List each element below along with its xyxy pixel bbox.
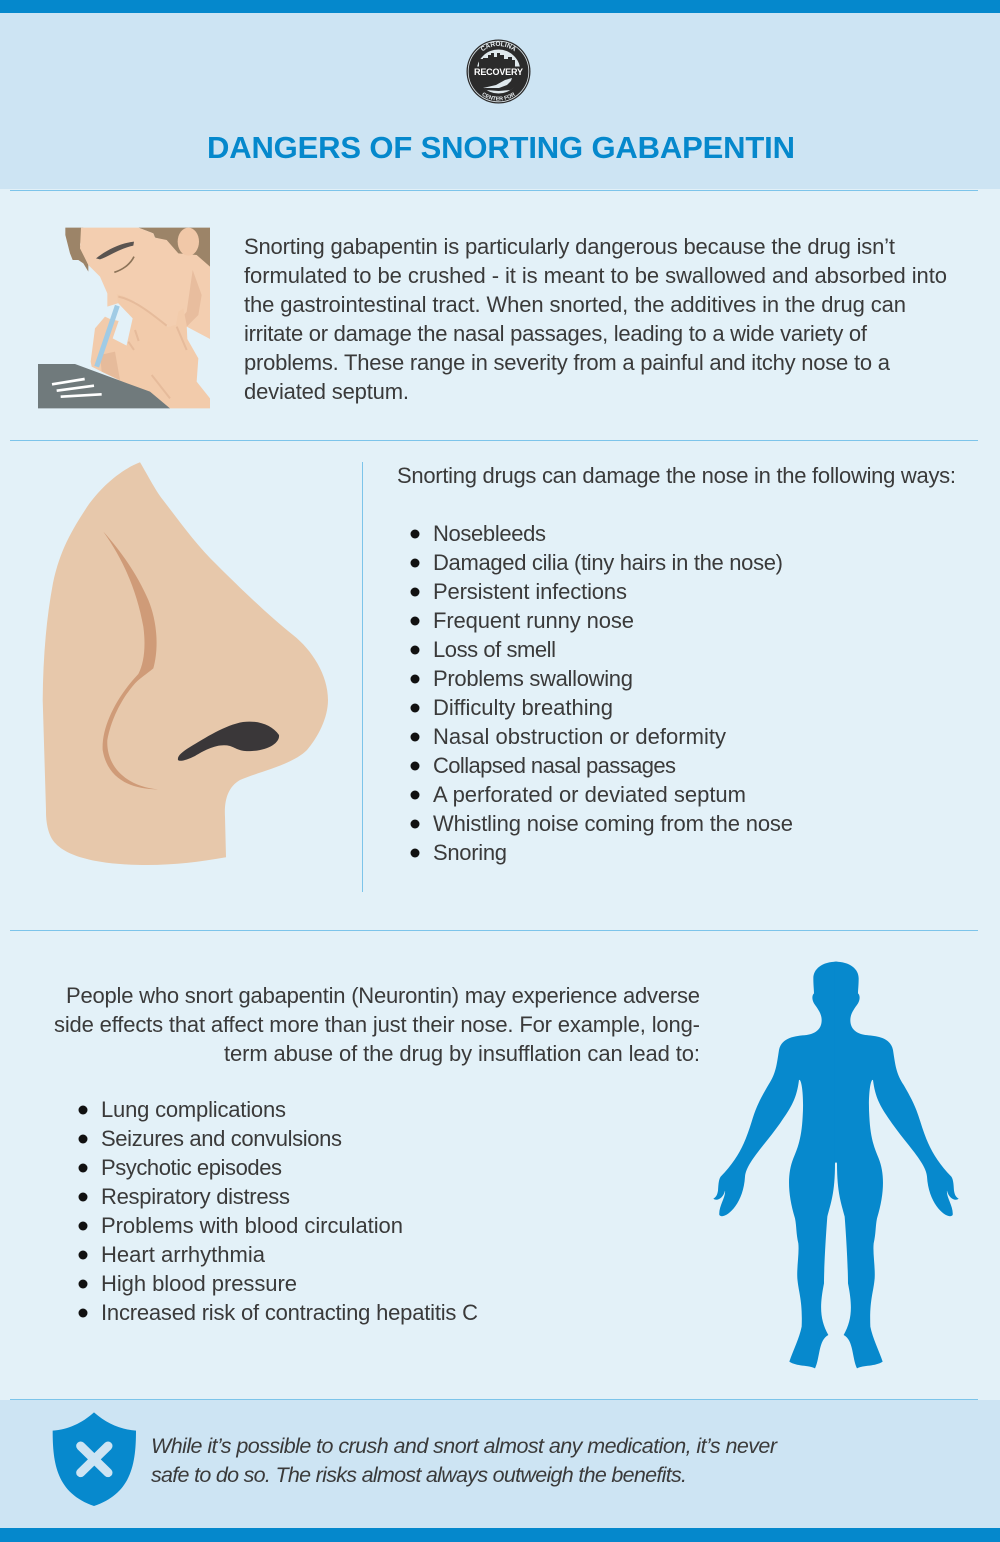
list items: Frequent runny nose [433, 608, 634, 633]
systemic intro paragraph [54, 983, 700, 1066]
list items: High blood pressure [101, 1271, 297, 1296]
nostril [178, 722, 279, 761]
ear [178, 228, 199, 256]
eyebrow [96, 242, 134, 259]
table [38, 364, 170, 408]
systemic intro paragraph: People who snort gabapentin (Neurontin) may experience adverse [66, 983, 700, 1008]
nostril crease [103, 532, 158, 789]
list items: Collapsed nasal passages [433, 753, 676, 778]
warning note [151, 1434, 778, 1487]
nose damage list [397, 463, 956, 865]
bullets [78, 1106, 88, 1318]
intro paragraph: the gastrointestinal tract. When snorted, the additives in the drug can [244, 292, 906, 317]
list items: Damaged cilia (tiny hairs in the nose) [433, 550, 783, 575]
logo: Carolina Recovery [466, 40, 530, 104]
warning note: safe to do so. The risks almost always outweigh the benefits. [151, 1463, 687, 1487]
eye [114, 257, 134, 272]
bullets [410, 530, 420, 858]
intro paragraph [244, 234, 947, 404]
logo: Carolina Recovery: RECOVERY [474, 67, 523, 77]
list items: Nosebleeds [433, 521, 546, 546]
list items: Problems swallowing [433, 666, 633, 691]
list items: Nasal obstruction or deformity [433, 724, 726, 749]
list items: Increased risk of contracting hepatitis C [101, 1300, 478, 1325]
logo: Carolina Recovery: CENTER FOR [482, 92, 516, 100]
straw [97, 306, 117, 367]
intro paragraph: deviated septum. [244, 379, 409, 404]
list items: Persistent infections [433, 579, 627, 604]
footer band [0, 1400, 1000, 1542]
list items: Heart arrhythmia [101, 1242, 266, 1267]
list items: Psychotic episodes [101, 1155, 282, 1180]
hair [65, 228, 210, 272]
list items: Snoring [433, 840, 507, 865]
list items: Lung complications [101, 1097, 286, 1122]
systemic effects text [54, 983, 700, 1325]
hand [91, 294, 210, 408]
finger shadows [100, 297, 187, 398]
intro paragraph: problems. These range in severity from a painful and itchy nose to a [244, 350, 891, 375]
intro paragraph: irritate or damage the nasal passages, leading to a wide variety of [244, 321, 868, 346]
list items: Problems with blood circulation [101, 1213, 403, 1238]
systemic intro paragraph: side effects that affect more than just their nose. For example, long- [54, 1012, 700, 1037]
list items: Difficulty breathing [433, 695, 613, 720]
intro paragraph: Snorting gabapentin is particularly dangerous because the drug isn’t [244, 234, 895, 259]
intro paragraph: formulated to be crushed - it is meant to be swallowed and absorbed into [244, 263, 947, 288]
icon: shield with X [53, 1412, 136, 1506]
illustration: person snorting a line [38, 228, 210, 408]
list items [433, 521, 793, 865]
list items: Respiratory distress [101, 1184, 290, 1209]
list items [101, 1097, 478, 1325]
illustration: nose [43, 462, 328, 865]
list items: Loss of smell [433, 637, 556, 662]
list items: Whistling noise coming from the nose [433, 811, 793, 836]
list intro: Snorting drugs can damage the nose in the following ways: [397, 463, 956, 488]
icon: human body silhouette [713, 962, 959, 1368]
face [80, 228, 210, 339]
list items: Seizures and convulsions [101, 1126, 342, 1151]
powder lines [52, 379, 102, 397]
warning note: While it’s possible to crush and snort almost any medication, it’s never [151, 1434, 778, 1458]
header band [0, 0, 1000, 189]
systemic intro paragraph: term abuse of the drug by insufflation can lead to: [224, 1041, 700, 1066]
neck shadow [177, 270, 202, 327]
title: DANGERS OF SNORTING GABAPENTIN [207, 130, 795, 165]
section divider lines [10, 190, 978, 930]
logo: Carolina Recovery: CAROLINA [481, 42, 516, 52]
list items: A perforated or deviated septum [433, 782, 746, 807]
